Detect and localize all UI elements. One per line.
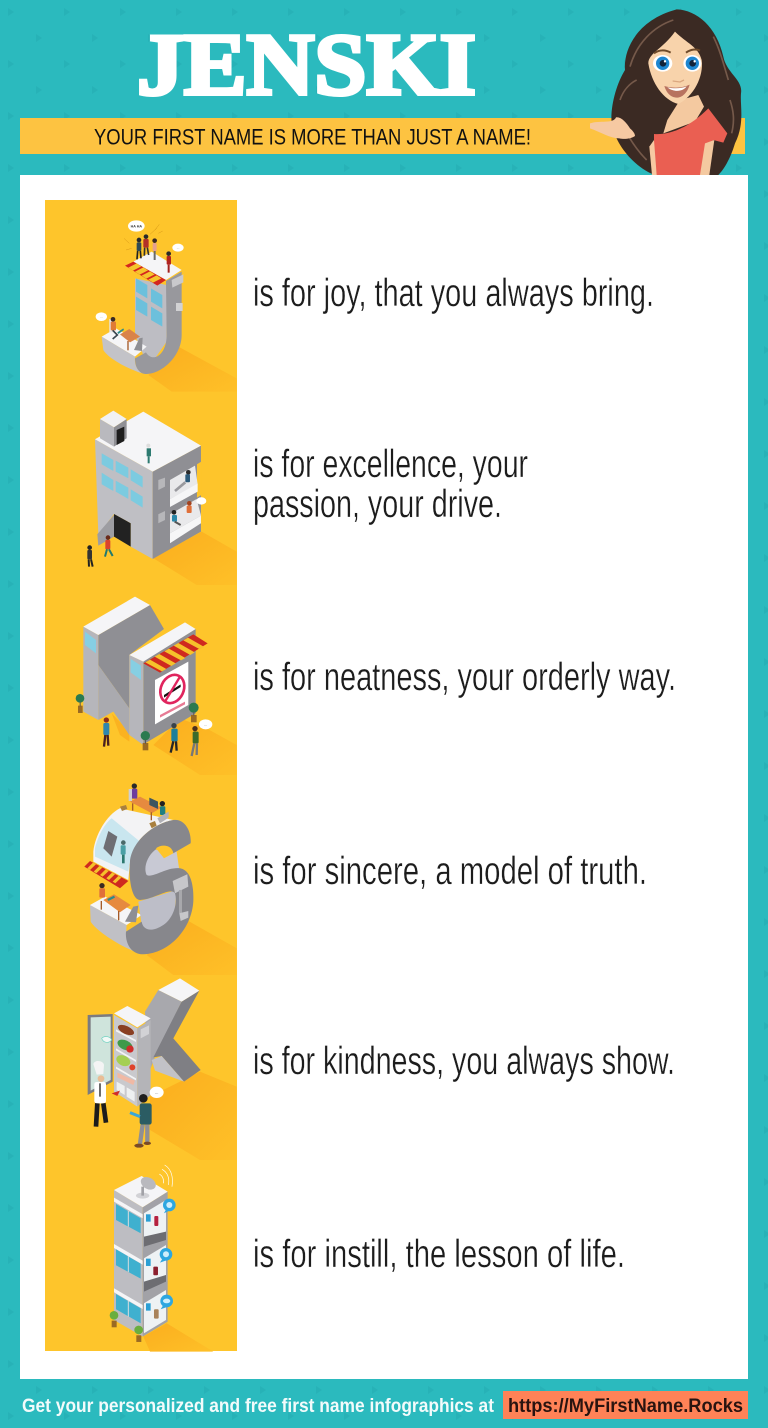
no smoking sign xyxy=(155,662,189,724)
windows xyxy=(102,453,143,508)
chef xyxy=(93,1061,106,1127)
illustration: letter E building xyxy=(87,411,237,585)
blue icon bubbles xyxy=(160,1199,176,1309)
illustration: letter K with fridge xyxy=(88,978,237,1160)
seated worker xyxy=(109,317,124,339)
character: woman presenting xyxy=(590,9,741,175)
banner xyxy=(20,118,745,154)
plants xyxy=(76,694,199,750)
desks and people xyxy=(99,783,169,922)
footer link: https://MyFirstName.Rocks xyxy=(508,1396,743,1417)
people near N xyxy=(103,717,212,756)
illustration: letter N building xyxy=(76,597,237,775)
speech bubbles: ... xyxy=(100,315,103,319)
illustration: letter J building xyxy=(96,220,237,392)
fridge xyxy=(88,1006,151,1107)
customer xyxy=(130,1087,164,1148)
customer: ... xyxy=(155,1090,158,1095)
tagline: YOUR FIRST NAME IS MORE THAN JUST A NAME! xyxy=(94,124,531,150)
people near N: ... xyxy=(204,721,207,726)
potted plants xyxy=(110,1311,143,1342)
speech bubbles: ... xyxy=(177,245,179,249)
illustration: letter I tower xyxy=(110,1165,213,1352)
awning xyxy=(143,634,208,673)
illustration: letter S building xyxy=(84,783,237,975)
tower floors xyxy=(114,1198,166,1333)
title: JENSKI xyxy=(137,17,476,114)
footer text: Get your personalized and free first name infographics at xyxy=(22,1396,495,1417)
awning xyxy=(84,861,128,888)
line E xyxy=(253,443,528,526)
white content panel xyxy=(20,175,748,1379)
line S: is for sincere, a model of truth. xyxy=(253,850,647,893)
yellow illustration column xyxy=(45,200,237,1351)
speech bubbles: HA HA xyxy=(131,224,142,228)
line E: is for excellence, your xyxy=(253,443,528,486)
line I: is for instill, the lesson of life. xyxy=(253,1233,625,1276)
speech bubbles xyxy=(96,220,184,321)
line E: passion, your drive. xyxy=(253,483,502,526)
satellite dish xyxy=(136,1165,172,1199)
people in E xyxy=(87,444,192,567)
people on the roof xyxy=(137,234,171,273)
